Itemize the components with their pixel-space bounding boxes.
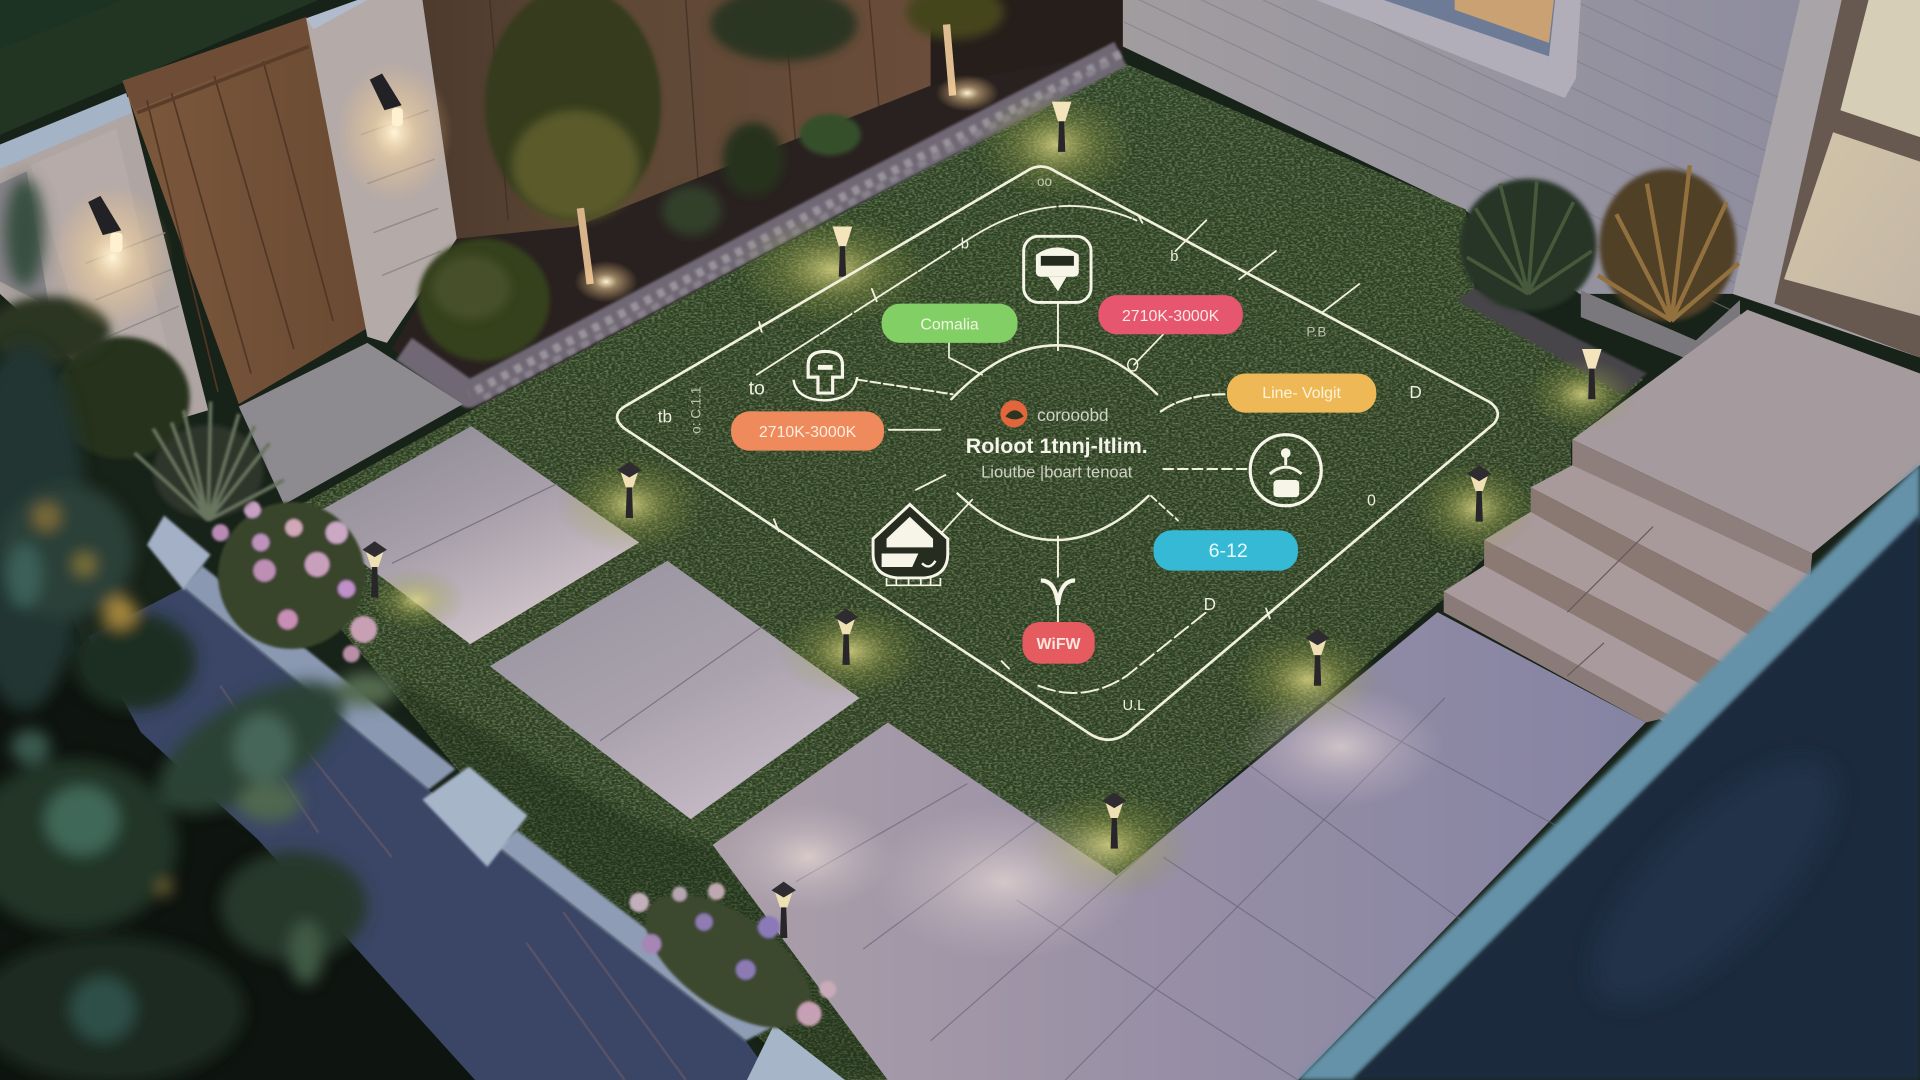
wooden back fence	[416, 0, 1124, 245]
foreground fence	[88, 516, 845, 1080]
pill: red wifi	[1022, 622, 1095, 664]
centre logo and brand: corooobd	[1037, 405, 1109, 425]
small annotation labels: 0	[1367, 493, 1376, 510]
flowers top	[212, 501, 377, 662]
icon: house pin	[873, 504, 948, 585]
connector: circle icon	[1163, 468, 1249, 470]
flowers bottom	[624, 868, 836, 1054]
icon: lamp with dish	[793, 351, 857, 400]
small annotation labels: tb	[658, 406, 672, 426]
shrubs and trees in the bed	[418, 0, 1004, 361]
small annotation labels: to	[749, 377, 765, 399]
gravel border	[404, 54, 1120, 398]
white fence post left	[0, 93, 208, 429]
node on red connector	[1128, 359, 1138, 371]
window	[1304, 0, 1581, 98]
centre subtitle: Lioutbe |boart tenoat	[981, 463, 1133, 482]
garden bed with mulch	[392, 51, 1124, 410]
small annotation labels: D	[1204, 594, 1216, 614]
small annotation labels: b	[1170, 249, 1178, 265]
connector: top icon	[1057, 302, 1059, 350]
central lower arc	[958, 493, 1149, 540]
wooden gate	[122, 17, 367, 404]
icon: top lamp box	[1024, 236, 1091, 302]
main walkway	[713, 612, 1646, 1080]
connector: house icon	[916, 475, 972, 547]
pill: cyan range: 6-12	[1209, 540, 1248, 562]
foreground blurred leaves	[0, 178, 397, 1080]
pill: yellow voltage	[1227, 373, 1376, 413]
connector: yellow pill	[1161, 394, 1224, 411]
path light glows	[367, 89, 1637, 961]
fence posts	[147, 516, 211, 590]
icon: circle robot	[1250, 435, 1321, 506]
small annotation labels	[658, 174, 1422, 714]
door frame and glass door	[1733, 0, 1920, 358]
pill: yellow voltage: Line- Volgit	[1262, 385, 1342, 402]
fence panels	[88, 588, 774, 1080]
boundary tick marks	[759, 214, 1359, 618]
small annotation labels: D	[1409, 382, 1422, 402]
wall lights on the fence	[51, 61, 453, 331]
garden spot lights	[574, 75, 999, 302]
small annotation labels: P.B	[1306, 325, 1326, 340]
plants beside the house	[1457, 165, 1740, 394]
pill: green	[882, 304, 1018, 343]
connector: cyan pill	[1151, 496, 1178, 520]
lawn	[294, 64, 1643, 1080]
central upper arc	[951, 345, 1157, 399]
pill: orange temperature: 2710K-3000K	[759, 424, 857, 441]
steps	[1444, 310, 1920, 722]
foreground shadow area	[0, 429, 475, 1080]
fence rail	[184, 566, 456, 790]
outer boundary diamond	[617, 167, 1498, 740]
left side path	[239, 343, 463, 504]
small annotation labels: U.L	[1122, 698, 1145, 714]
inner dashed arc	[757, 206, 1136, 375]
pill: cyan range	[1153, 530, 1298, 571]
pill: green: Comalia	[920, 316, 979, 333]
connector: orange pill	[889, 429, 940, 431]
small annotation labels: b	[961, 237, 969, 253]
roof with edge	[1297, 463, 1920, 1080]
path light fixtures	[362, 102, 1602, 938]
pill: red wifi: WiFW	[1037, 636, 1081, 653]
connector: red pill	[1134, 334, 1163, 365]
diagram: lawn infographic overlay	[617, 167, 1498, 740]
small annotation labels: o: C.1.1	[688, 387, 703, 434]
house wall with siding	[1123, 0, 1861, 320]
pill: orange temperature	[731, 411, 884, 451]
connector: green pill	[949, 343, 982, 375]
icon: Y connector	[1041, 580, 1075, 605]
white fence post right	[306, 0, 457, 343]
connector: bottom stem	[1057, 536, 1059, 622]
dashed lower curve	[1002, 612, 1206, 693]
shrubs at left of the gate	[0, 296, 284, 520]
small annotation labels: oo	[1037, 174, 1052, 189]
pill: red temperature: 2710K-3000K	[1122, 308, 1220, 325]
centre title: Roloot 1tnnj-ltlim.	[966, 434, 1148, 458]
paving stones	[305, 426, 860, 819]
pill: red temperature	[1098, 295, 1243, 334]
centre logo and brand	[1000, 400, 1109, 427]
connector: lamp icon	[857, 380, 953, 394]
